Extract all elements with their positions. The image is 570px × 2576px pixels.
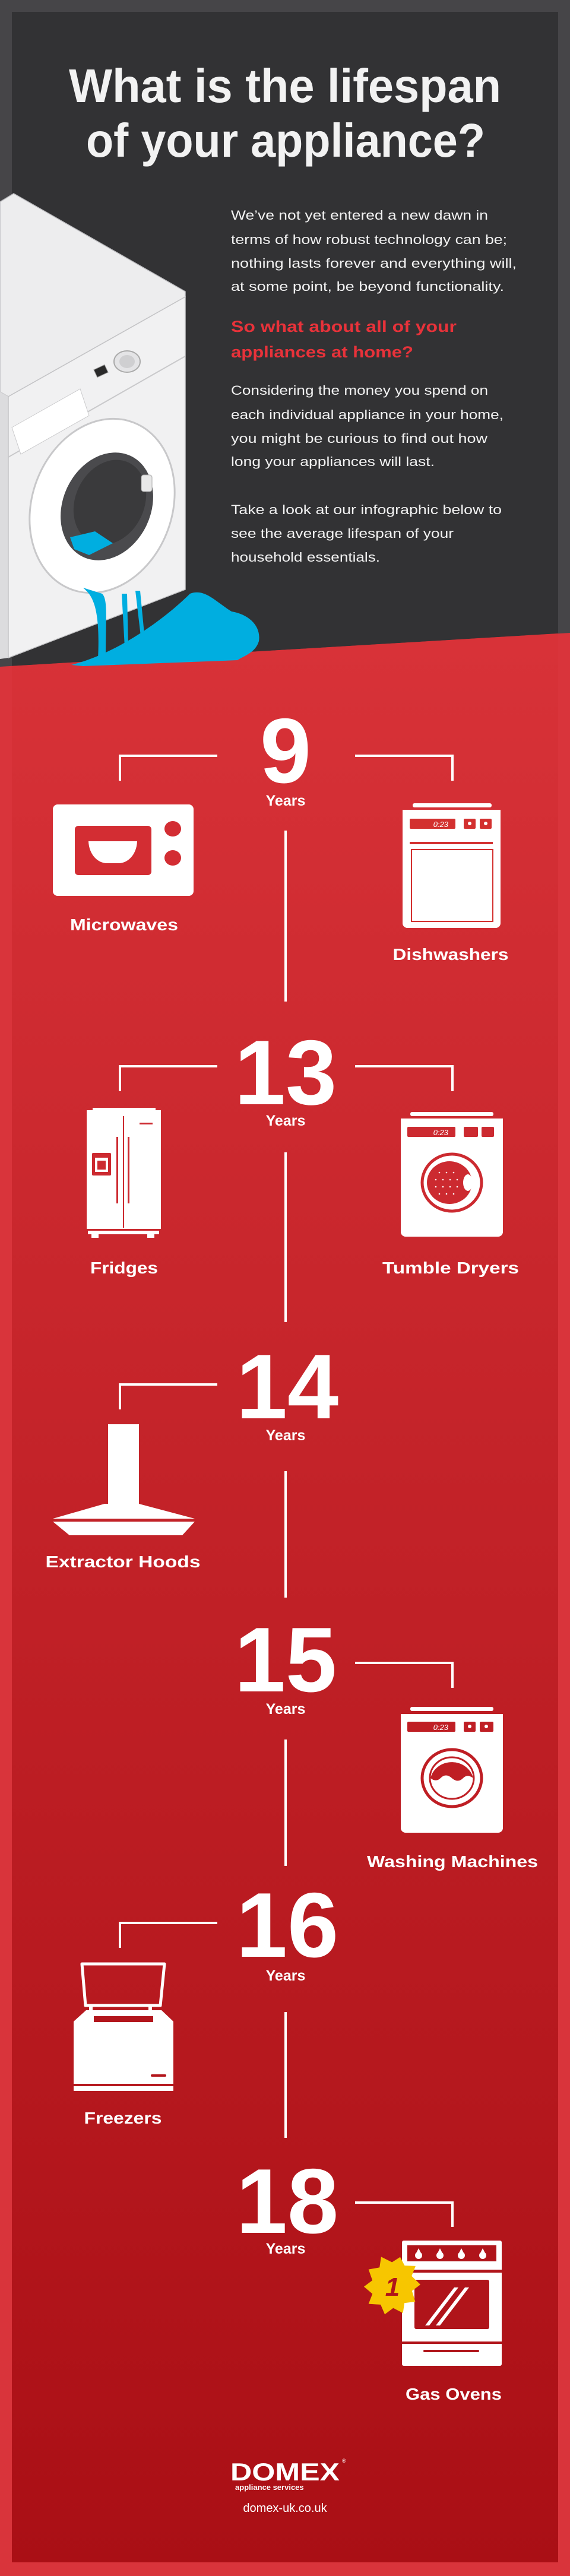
year number: 13: 13	[235, 1021, 337, 1124]
label: Gas Ovens: Gas Ovens	[406, 2385, 502, 2403]
logo: DOMEX: ®	[342, 2458, 346, 2464]
paragraph 3: household essentials.	[231, 550, 380, 565]
intro paragraph: nothing lasts forever and everything will,	[231, 256, 517, 271]
logo: DOMEX: appliance services	[235, 2483, 304, 2492]
icon: yellow badge	[359, 2250, 426, 2321]
website: domex-uk.co.uk	[243, 2502, 328, 2515]
year number: 13: Years	[266, 1113, 305, 1129]
year number: 9: 9	[260, 699, 311, 802]
title: of your appliance?	[86, 114, 485, 167]
year number: 14: 14	[236, 1335, 338, 1438]
year number: 16: 16	[236, 1874, 338, 1976]
red subheading: appliances at home?	[231, 343, 413, 361]
paragraph 3	[231, 502, 502, 565]
label: Extractor Hoods: Extractor Hoods	[45, 1552, 201, 1571]
icon: yellow badge: 1	[385, 2273, 400, 2302]
year number: 14: Years	[266, 1427, 305, 1444]
intro paragraph	[231, 208, 517, 294]
icon: fridge	[87, 1108, 161, 1238]
icon: chest freezer	[74, 1964, 173, 2091]
year number: 18: 18	[236, 2150, 338, 2252]
paragraph 2: Considering the money you spend on	[231, 383, 488, 398]
title	[69, 59, 501, 167]
paragraph 2: you might be curious to find out how	[231, 431, 487, 446]
paragraph 3: Take a look at our infographic below to	[231, 502, 502, 517]
label: Fridges: Fridges	[90, 1259, 158, 1277]
label: Freezers: Freezers	[84, 2109, 162, 2127]
year number: 15: Years	[266, 1701, 305, 1718]
red background	[0, 633, 570, 2576]
year number: 15: 15	[235, 1608, 337, 1711]
red subheading: So what about all of your	[231, 318, 457, 335]
paragraph 3: see the average lifespan of your	[231, 526, 454, 541]
label: Tumble Dryers: Tumble Dryers	[382, 1259, 519, 1277]
timeline connectors	[120, 756, 452, 2227]
year number: 16: Years	[266, 1967, 305, 1984]
paragraph 2: each individual appliance in your home,	[231, 407, 504, 422]
illustration: leaking washing machine	[0, 194, 259, 666]
icon: dishwasher: 0:23	[433, 820, 449, 829]
label: Dishwashers: Dishwashers	[393, 945, 508, 964]
title: What is the lifespan	[69, 59, 501, 112]
icon: extractor hood	[53, 1424, 195, 1535]
icon: tumble dryer	[401, 1112, 503, 1237]
intro paragraph: We’ve not yet entered a new dawn in	[231, 208, 488, 223]
icon: dishwasher	[403, 803, 501, 928]
year number: 18: Years	[266, 2241, 305, 2257]
intro paragraph: terms of how robust technology can be;	[231, 232, 507, 247]
icon: washing machine	[401, 1707, 503, 1833]
intro paragraph: at some point, be beyond functionality.	[231, 279, 504, 294]
icon: washing machine: 0:23	[433, 1723, 449, 1732]
icon: tumble dryer: 0:23	[433, 1128, 449, 1137]
red subheading	[231, 318, 457, 361]
icon: microwave	[53, 804, 194, 896]
paragraph 2	[231, 383, 504, 469]
label: Washing Machines: Washing Machines	[367, 1852, 538, 1871]
icon: gas oven	[402, 2241, 502, 2366]
logo: DOMEX	[230, 2458, 346, 2492]
year number: 9: Years	[266, 793, 305, 809]
logo: DOMEX: DOMEX	[230, 2458, 340, 2486]
paragraph 2: long your appliances will last.	[231, 454, 435, 469]
label: Microwaves: Microwaves	[70, 915, 178, 934]
header background	[0, 0, 570, 671]
